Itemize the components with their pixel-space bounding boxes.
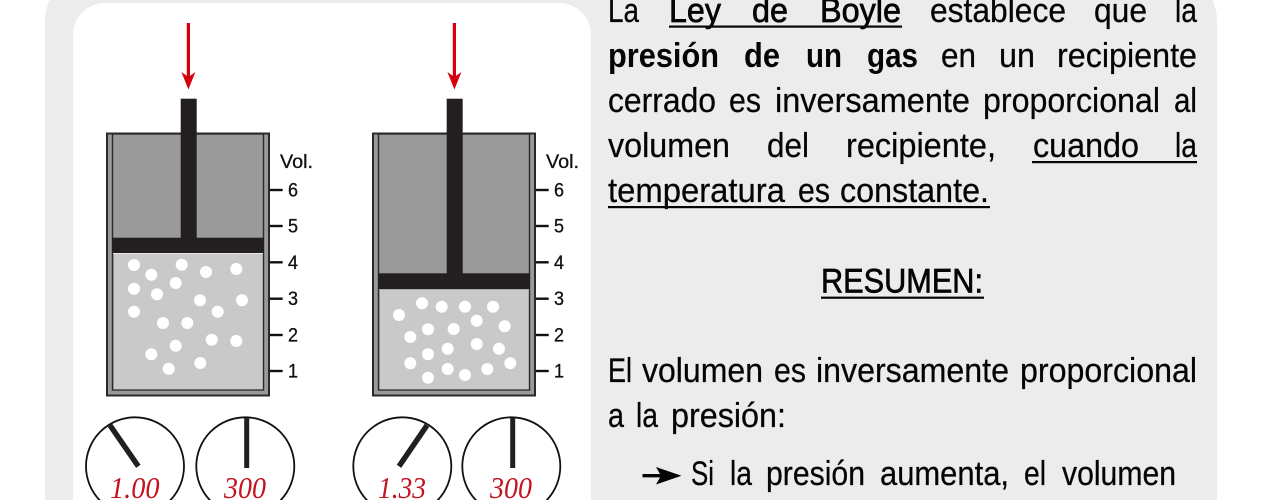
text block: summary: proporcional <box>1020 352 1197 390</box>
volume scale 1 <box>270 152 313 382</box>
text block: summary: El <box>608 352 632 390</box>
text block: Boyle's law definition: de <box>744 37 780 75</box>
list item: pressure increases: volumen <box>1062 455 1176 493</box>
gauge: temperature 300 second <box>462 417 560 500</box>
text block: Boyle's law definition <box>608 0 1197 210</box>
cylinder 1 <box>107 99 269 395</box>
volume scale 2: Vol. <box>546 152 579 173</box>
gauge: pressure 1.33 <box>353 417 451 500</box>
text block: Boyle's law definition: un <box>999 37 1035 75</box>
list item: pressure increases: presión <box>766 455 865 493</box>
list item: pressure increases: el <box>1024 455 1046 493</box>
cylinder 2 <box>373 99 535 395</box>
piston diagram 1 <box>86 23 313 500</box>
list item: pressure increases: Si <box>691 455 714 493</box>
volume scale 2: 6 <box>554 180 564 202</box>
text block: summary: es <box>774 352 806 390</box>
text block: Boyle's law definition: al <box>1174 82 1197 120</box>
piston diagram 2 <box>353 23 579 500</box>
gas particles 2 <box>393 297 516 384</box>
text block: Boyle's law definition: temperatura <box>608 172 785 210</box>
icon: red arrow 2 <box>447 23 461 90</box>
gauge: pressure 1.00 <box>86 417 184 500</box>
volume scale 2: 4 <box>554 253 564 274</box>
text block: Boyle's law definition: gas <box>867 37 918 75</box>
text block: Boyle's law definition: es <box>798 172 830 210</box>
volume scale 1: 3 <box>288 289 298 310</box>
volume scale 1: Vol. <box>280 152 313 173</box>
text block: Boyle's law definition: recipiente, <box>846 127 996 165</box>
volume scale 2: 5 <box>554 216 564 238</box>
panel: white diagram card <box>73 3 591 500</box>
text block: Boyle's law definition: es <box>729 82 761 120</box>
text block: Boyle's law definition: recipiente <box>1057 37 1197 75</box>
text block: Boyle's law definition: volumen <box>608 127 730 165</box>
text block: Boyle's law definition: un <box>806 37 842 75</box>
list item: pressure increases: aumenta, <box>880 455 1009 493</box>
text block: summary: volumen <box>642 352 763 390</box>
icon: red arrow 1 <box>181 23 195 90</box>
volume scale 1: 4 <box>288 253 298 274</box>
volume scale 1: 6 <box>288 180 298 202</box>
text block: Boyle's law definition: cuando <box>1033 127 1139 165</box>
text block: summary: presión: <box>671 397 786 435</box>
text block: Boyle's law definition: proporcional <box>983 82 1160 120</box>
volume scale 1: 1 <box>288 362 298 382</box>
heading: RESUMEN: RESUMEN: <box>821 263 983 301</box>
text block: Boyle's law definition: cerrado <box>608 82 716 120</box>
volume scale 2: 2 <box>554 326 564 346</box>
text block: summary: la <box>636 397 658 435</box>
text block: summary: inversamente <box>816 352 1009 390</box>
text block: Boyle's law definition: la <box>1175 127 1197 165</box>
text block: summary <box>608 352 1197 435</box>
icon: black arrow <box>642 467 682 484</box>
text block: summary: a <box>608 397 624 435</box>
text block: Boyle's law definition: del <box>767 127 809 165</box>
gas particles 1 <box>128 259 248 375</box>
volume scale 2 <box>536 152 579 382</box>
gauge: temperature 300 <box>196 417 294 500</box>
volume scale 1: 5 <box>288 216 298 238</box>
text block: Boyle's law definition: inversamente <box>775 82 970 120</box>
list item: pressure increases <box>642 455 1176 493</box>
volume scale 2: 1 <box>554 362 564 382</box>
volume scale 1: 2 <box>288 326 298 346</box>
volume scale 2: 3 <box>554 289 564 310</box>
list item: pressure increases: la <box>730 455 752 493</box>
text block: Boyle's law definition: en <box>941 37 976 75</box>
text block: Boyle's law definition: constante. <box>840 172 989 210</box>
text block: Boyle's law definition: presión <box>608 37 719 75</box>
